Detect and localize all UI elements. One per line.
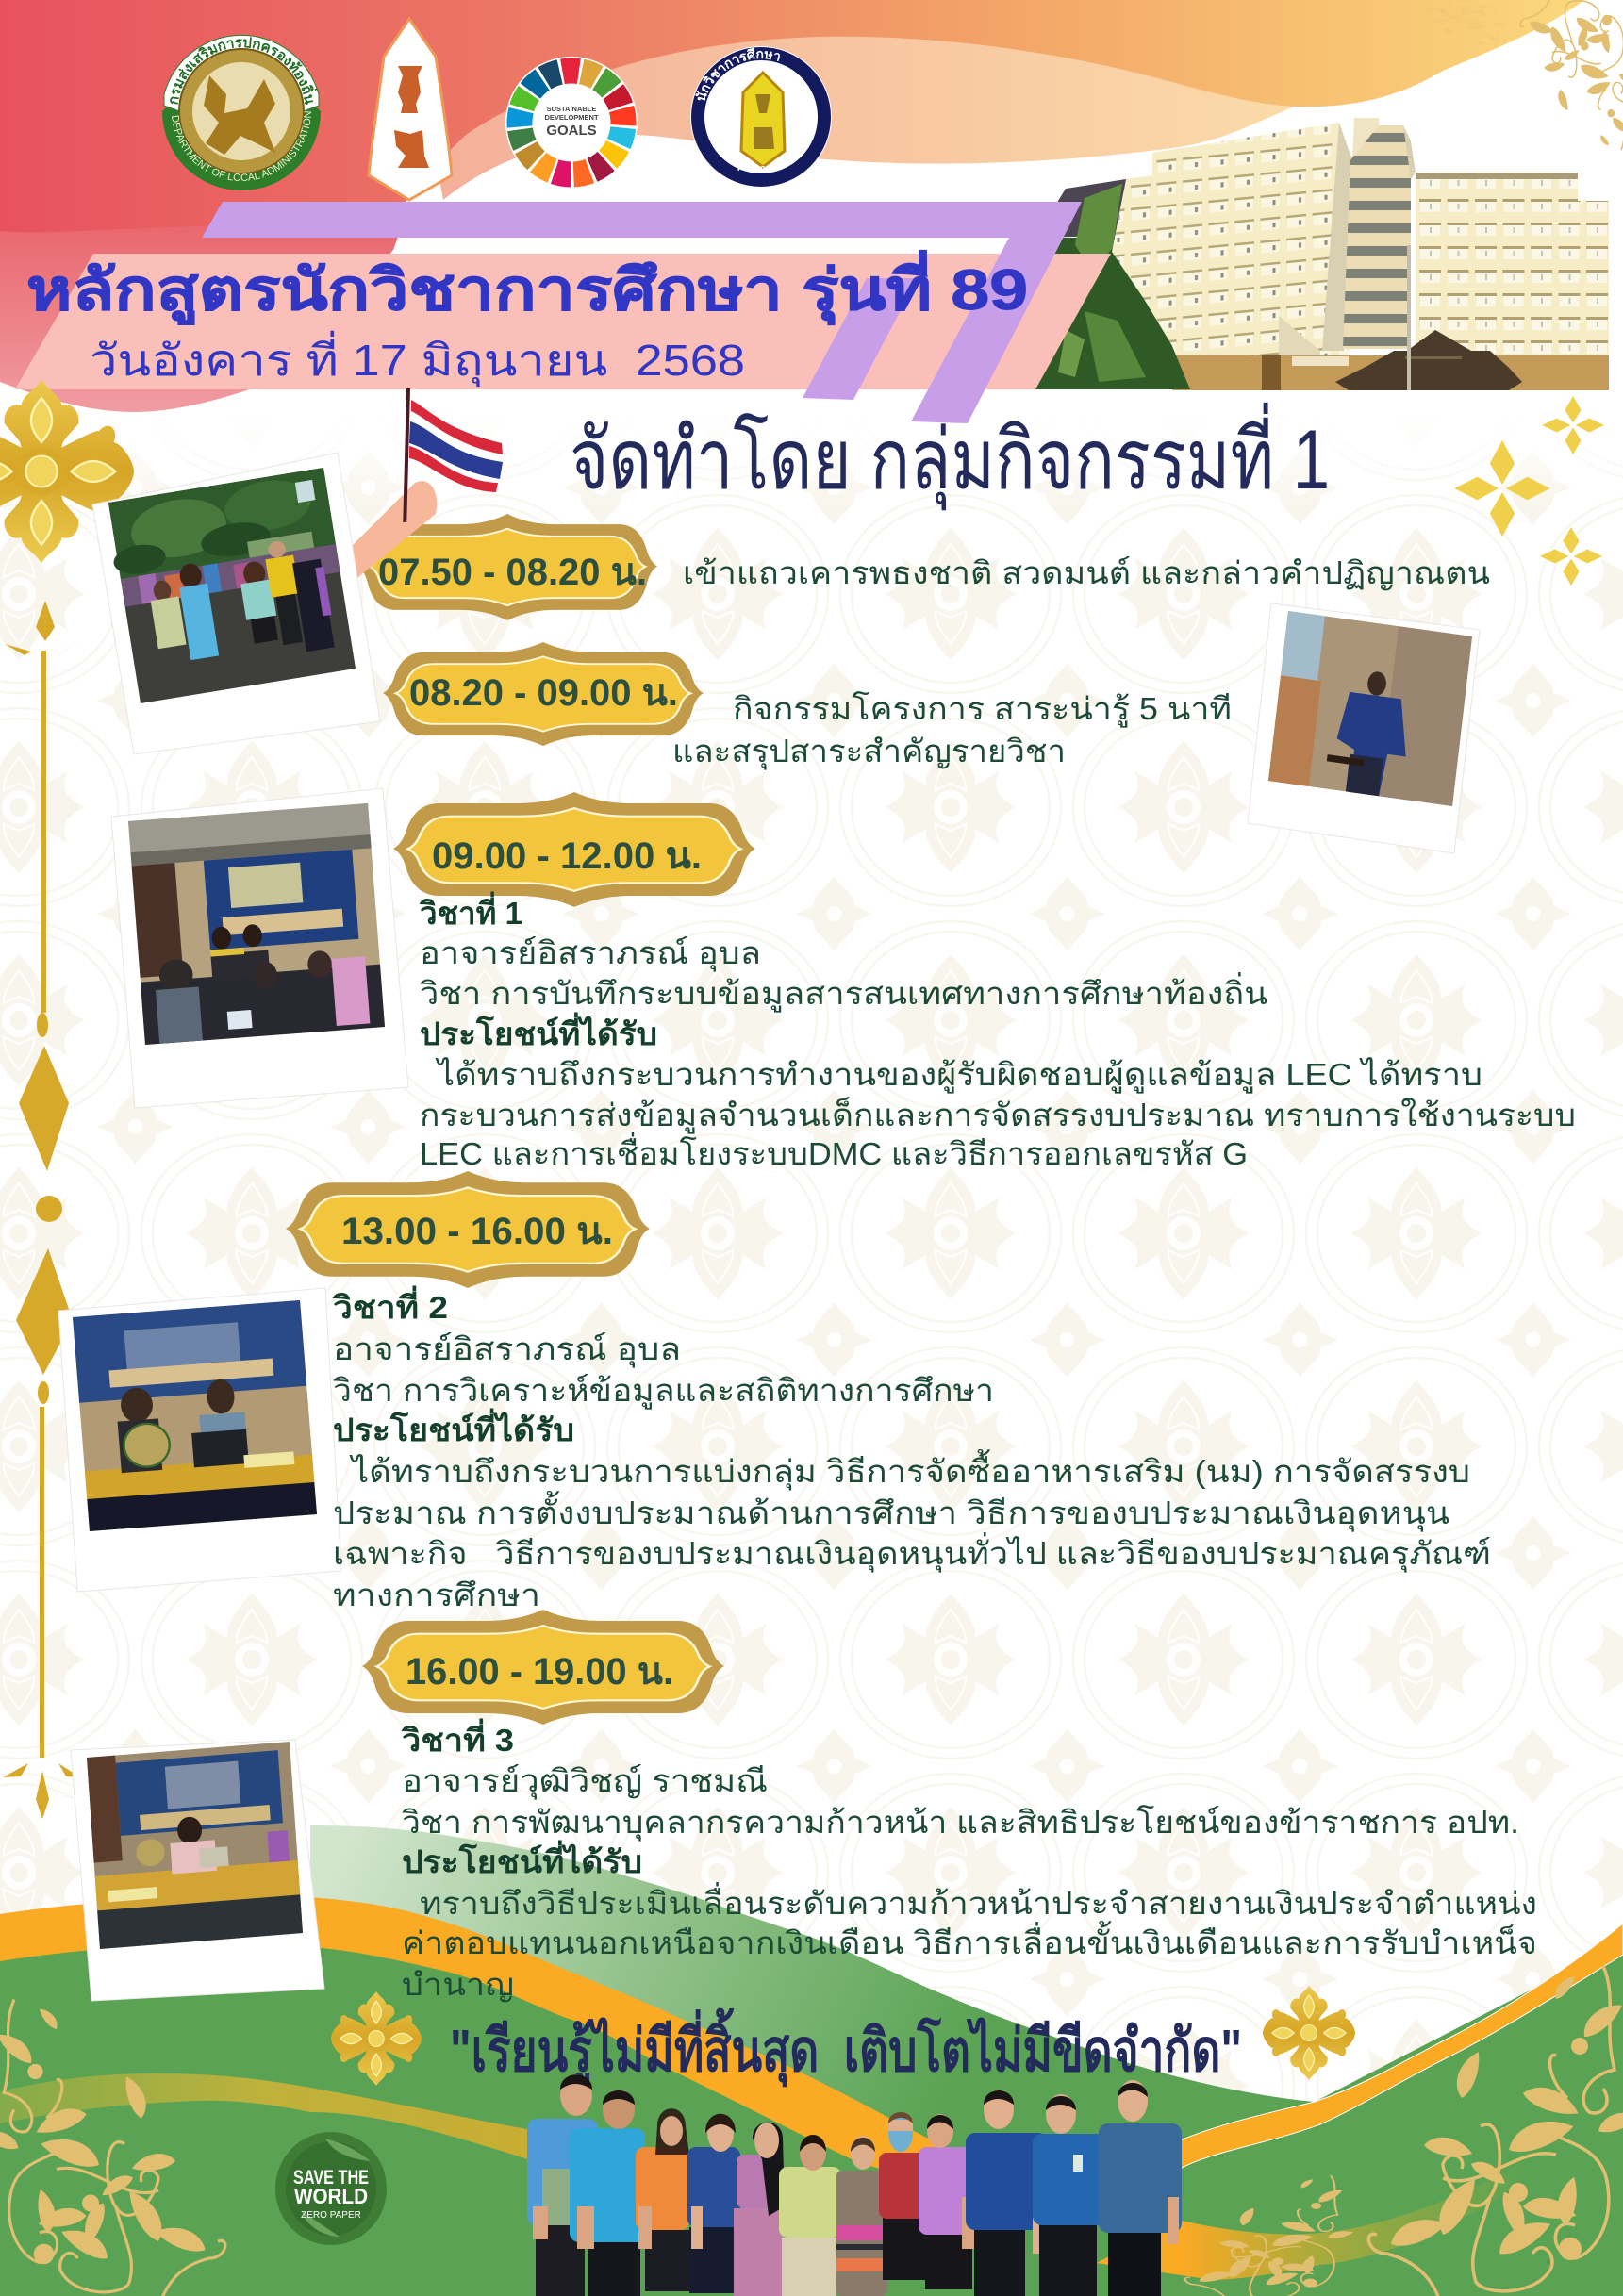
icon: save the world badge (275, 2132, 387, 2245)
session 1 text: วิชาที่ 1 (420, 891, 522, 931)
session 2 text: ประมาณ การตั้งงบประมาณด้านการศึกษา วิธีการของบประมาณเงินอุดหนุน (333, 1491, 1449, 1532)
polaroid photo 5: lecturer (71, 1740, 324, 2001)
time badge 09.00 (393, 792, 755, 907)
logo: department of local administration: DEPARTMENT OF LOCAL ADMINISTRATION (172, 111, 311, 181)
icon: gold clover cluster small top (1542, 396, 1604, 454)
person 5 (734, 2123, 785, 2296)
icon: gold clover cluster large (1454, 440, 1550, 537)
session 1 text: LEC และการเชื่อมโยงระบบDMC และวิธีการออกเลขรหัส G (420, 1132, 1248, 1171)
bottom waves (0, 1825, 1623, 2296)
time badge 07.50 (357, 514, 657, 620)
polaroid photo 1: assembly (92, 453, 380, 754)
session 2 text: วิชาที่ 2 (332, 1285, 448, 1325)
session 2 text: ได้ทราบถึงกระบวนการแบ่งกลุ่ม วิธีการจัดซื้ออาหารเสริม (นม) การจัดสรรงบ (349, 1449, 1470, 1491)
session 1 text (419, 891, 1576, 1171)
activity text 1: เข้าแถวเคารพธงชาติ สวดมนต์ และกล่าวคำปฏิญาณตน (683, 555, 1490, 590)
bottom-right floral ornament second (1185, 2175, 1354, 2296)
logo: academic officer course seal: รุ่นที่ 89 (737, 162, 765, 172)
person 7 (836, 2136, 887, 2296)
title: หลักสูตรนักวิชาการศึกษา รุ่นที่ 89 (26, 250, 1028, 325)
logo: academic officer course seal (690, 46, 832, 187)
time badge 13.00 (286, 1171, 650, 1288)
time badge 13.00: 13.00 - 16.00 น. (341, 1211, 613, 1252)
session 1 text: วิชา การบันทึกระบบข้อมูลสารสนเทศทางการศึกษาท้องถิ่น (419, 972, 1267, 1013)
activity text 2 (672, 691, 1232, 770)
purple seven shapes (202, 202, 1082, 423)
session 2 text: ประโยชน์ที่ได้รับ (333, 1408, 574, 1447)
session 3 text: ประโยชน์ที่ได้รับ (402, 1840, 642, 1879)
person 3 (636, 2108, 689, 2291)
icon: save the world badge: SAVE THE (293, 2167, 369, 2189)
logo: department of local administration (162, 34, 321, 190)
person 12 (1099, 2080, 1182, 2296)
header background waves (0, 0, 1584, 412)
person 11 (1033, 2094, 1110, 2296)
icon: gold clover cluster small bottom (1540, 527, 1602, 586)
time badge 08.20 (383, 642, 704, 746)
session 1 text: ประโยชน์ที่ได้รับ (420, 1012, 657, 1051)
session 1 text: ได้ทราบถึงกระบวนการทำงานของผู้รับผิดชอบผู้ดูแลข้อมูล LEC ได้ทราบ (435, 1057, 1482, 1094)
time badge 08.20: 08.20 - 09.00 น. (409, 672, 678, 714)
flag and hand (340, 388, 504, 581)
pink title banner (15, 254, 1111, 389)
polaroid photo 4: two lecturers (58, 1288, 341, 1592)
person 9 (919, 2114, 979, 2289)
logo: shield emblem (369, 19, 452, 200)
logo: sustainable development goals wheel (498, 49, 645, 196)
session 1 text: กระบวนการส่งข้อมูลจำนวนเด็กและการจัดสรรงบประมาณ ทราบการใช้งานระบบ (420, 1097, 1576, 1134)
time badge 07.50: 07.50 - 08.20 น. (378, 552, 647, 593)
bottom-right floral ornament (1368, 1966, 1623, 2296)
activity text 2: และสรุปสาระสำคัญรายวิชา (672, 734, 1066, 770)
person 2 (570, 2090, 645, 2296)
motto quote: "เรียนรู้ไม่มีที่สิ้นสุด เติบโตไม่มีขีดจำกัด" (450, 2007, 1242, 2087)
session 2 text: ทางการศึกษา (333, 1577, 540, 1612)
time badge 16.00: 16.00 - 19.00 น. (406, 1651, 673, 1693)
activity text 2: กิจกรรมโครงการ สาระน่ารู้ 5 นาที (733, 691, 1232, 728)
polaroid photo 2: speaker (1248, 603, 1480, 853)
session 2 text (332, 1285, 1491, 1612)
person 10 (966, 2090, 1048, 2296)
icon: gold flower quote right (1263, 1986, 1355, 2080)
person 4 (687, 2114, 740, 2293)
person 8 (879, 2112, 932, 2280)
time badge 16.00 (362, 1610, 724, 1725)
session 3 text: ทราบถึงวิธีประเมินเลื่อนระดับความก้าวหน้าประจำสายงานเงินประจำตำแหน่ง (420, 1882, 1537, 1921)
group photo of twelve staff (527, 2074, 1182, 2296)
organiser heading: จัดทำโดย กลุ่มกิจกรรมที่ 1 (570, 403, 1330, 511)
person 6 (779, 2135, 841, 2296)
logo: sustainable development goals wheel: GOALS (546, 123, 597, 139)
icon: gold flower top left (0, 380, 134, 563)
logo: academic officer course seal: นักวิชาการศึกษา (695, 47, 780, 101)
session 3 text: อาจารย์วุฒิวิชญ์ ราชมณี (402, 1763, 768, 1800)
session 2 text: วิชา การวิเคราะห์ข้อมูลและสถิติทางการศึกษา (332, 1373, 994, 1410)
icon: gold flower quote left (331, 1991, 422, 2086)
logo: sustainable development goals wheel: DEVELOPMENT (544, 113, 599, 122)
logo: department of local administration: กรมส่งเสริมการปกครองท้องถิ่น (170, 37, 317, 105)
session 2 text: เฉพาะกิจ วิธีการของบประมาณเงินอุดหนุนทั่วไป และวิธีของบประมาณครุภัณฑ์ (333, 1532, 1491, 1573)
hotel building photo (1035, 118, 1609, 390)
session 2 text: อาจารย์อิสราภรณ์ อุบล (333, 1331, 681, 1368)
session 3 text: วิชา การพัฒนาบุคลากรความก้าวหน้า และสิทธิประโยชน์ของข้าราชการ อปท. (401, 1805, 1519, 1842)
polaroid photo 3: classroom (111, 788, 408, 1108)
session 3 text: ค่าตอบแทนนอกเหนือจากเงินเดือน วิธีการเลื่อนขั้นเงินเดือนและการรับบำเหน็จ (402, 1921, 1537, 1960)
date: วันอังคาร ที่ 17 มิถุนายน 2568 (90, 330, 745, 388)
icon: save the world badge: ZERO PAPER (301, 2210, 361, 2221)
icon: save the world badge: WORLD (294, 2184, 368, 2208)
logo: sustainable development goals wheel: SUSTAINABLE (547, 105, 596, 113)
session 3 text: วิชาที่ 3 (401, 1718, 514, 1758)
session 1 text: อาจารย์อิสราภรณ์ อุบล (420, 935, 761, 972)
top-right floral ornament (1520, 0, 1623, 150)
session 3 text (401, 1718, 1537, 2002)
session 3 text: บำนาญ (402, 1967, 514, 2002)
time badge 09.00: 09.00 - 12.00 น. (432, 835, 702, 877)
left timeline gold ornament (3, 601, 82, 1819)
person 1 (527, 2074, 598, 2296)
bottom-left floral ornament (0, 1999, 225, 2296)
